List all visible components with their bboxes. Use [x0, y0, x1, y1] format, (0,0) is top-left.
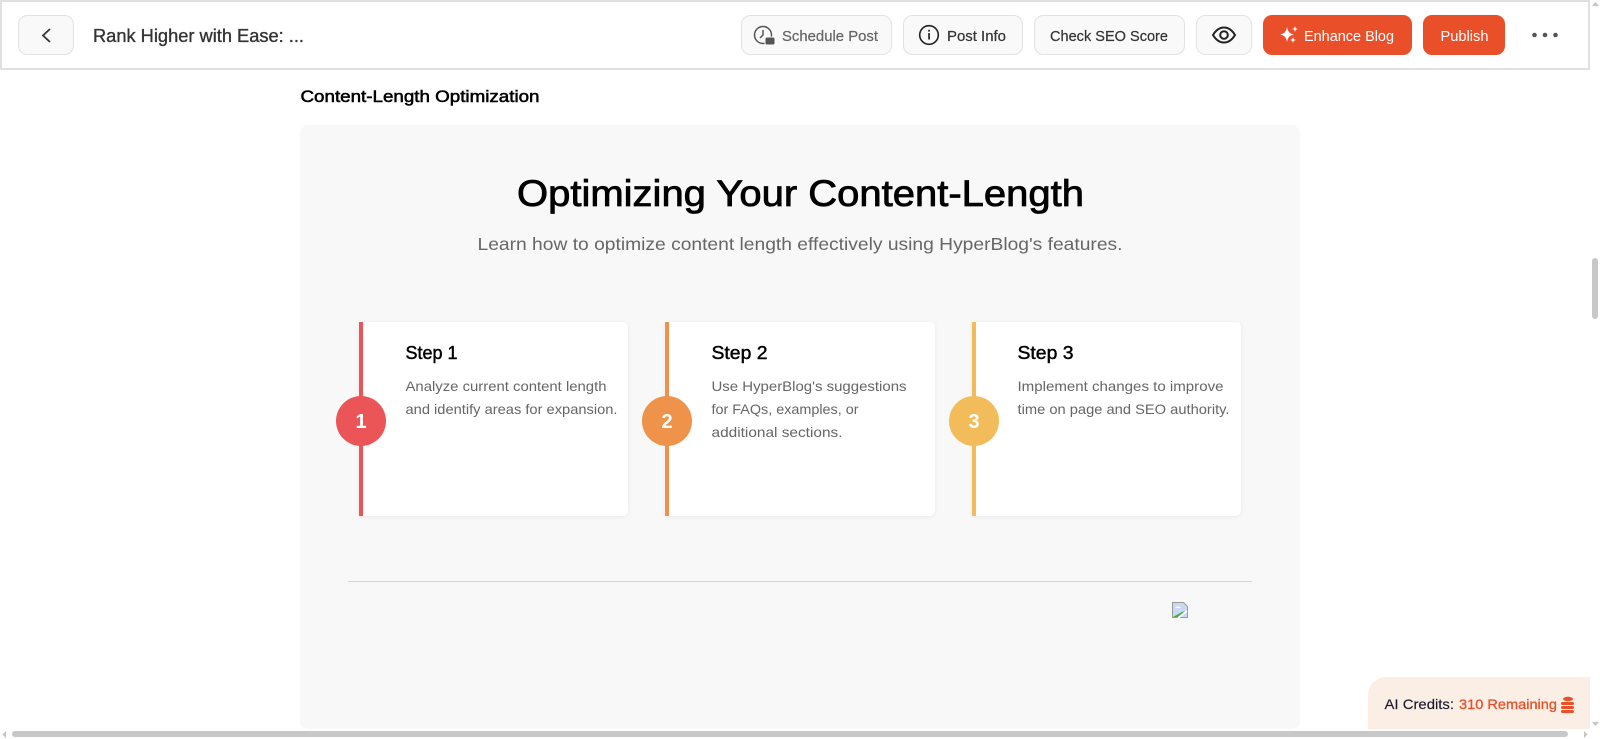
publish button — [1423, 15, 1505, 55]
more options icon — [1532, 33, 1558, 37]
publish button: Publish — [1440, 29, 1488, 45]
step 1 badge — [336, 396, 386, 446]
step 2 badge — [642, 396, 692, 446]
step 1 description: Analyze current content length — [406, 378, 606, 394]
step 2 badge: 2 — [661, 411, 673, 433]
check SEO score button: Check SEO Score — [1050, 29, 1168, 45]
step 2 card — [642, 322, 935, 516]
step 3 heading: Step 3 — [1018, 343, 1074, 363]
blog title: Rank Higher with Ease: ... — [93, 26, 304, 46]
post info button: Post Info — [947, 29, 1006, 45]
step 1 description — [406, 378, 618, 417]
AI credits badge — [1368, 677, 1590, 729]
step 2 description: Use HyperBlog's suggestions — [712, 378, 906, 394]
post info button — [904, 16, 1022, 54]
step 2 description: for FAQs, examples, or — [712, 401, 859, 417]
AI credits badge: 310 Remaining — [1459, 696, 1557, 712]
step 3 description: Implement changes to improve — [1018, 378, 1224, 394]
enhance blog button: Enhance Blog — [1304, 29, 1394, 45]
main panel — [300, 125, 1300, 729]
schedule post button — [742, 16, 892, 54]
enhance blog button — [1263, 15, 1412, 55]
step 2 heading: Step 2 — [712, 343, 768, 363]
section heading: Content-Length Optimization — [300, 87, 540, 106]
step 3 description — [1018, 378, 1230, 417]
step 3 card — [949, 322, 1241, 516]
check SEO score button — [1034, 16, 1184, 54]
step 3 badge: 3 — [968, 411, 980, 433]
icon: broken image — [1172, 602, 1188, 618]
vertical scrollbar — [1592, 2, 1599, 726]
step 2 description — [712, 378, 906, 440]
horizontal scrollbar — [2, 731, 1588, 738]
step 1 description: and identify areas for expansion. — [406, 401, 618, 417]
panel title: Optimizing Your Content-Length — [517, 173, 1084, 214]
icon: coins — [1561, 697, 1574, 713]
step 3 badge — [949, 396, 999, 446]
step 1 card — [336, 322, 628, 516]
step 2 description: additional sections. — [712, 424, 842, 440]
panel subtitle: Learn how to optimize content length effectively using HyperBlog's features. — [478, 234, 1122, 254]
header toolbar — [1, 1, 1589, 69]
AI credits badge: AI Credits: — [1384, 696, 1454, 712]
step 1 badge: 1 — [355, 411, 367, 433]
preview eye button — [1196, 16, 1252, 54]
step 3 description: time on page and SEO authority. — [1018, 401, 1230, 417]
schedule post button: Schedule Post — [782, 29, 878, 45]
back button — [18, 16, 74, 54]
step 1 heading: Step 1 — [406, 343, 458, 363]
